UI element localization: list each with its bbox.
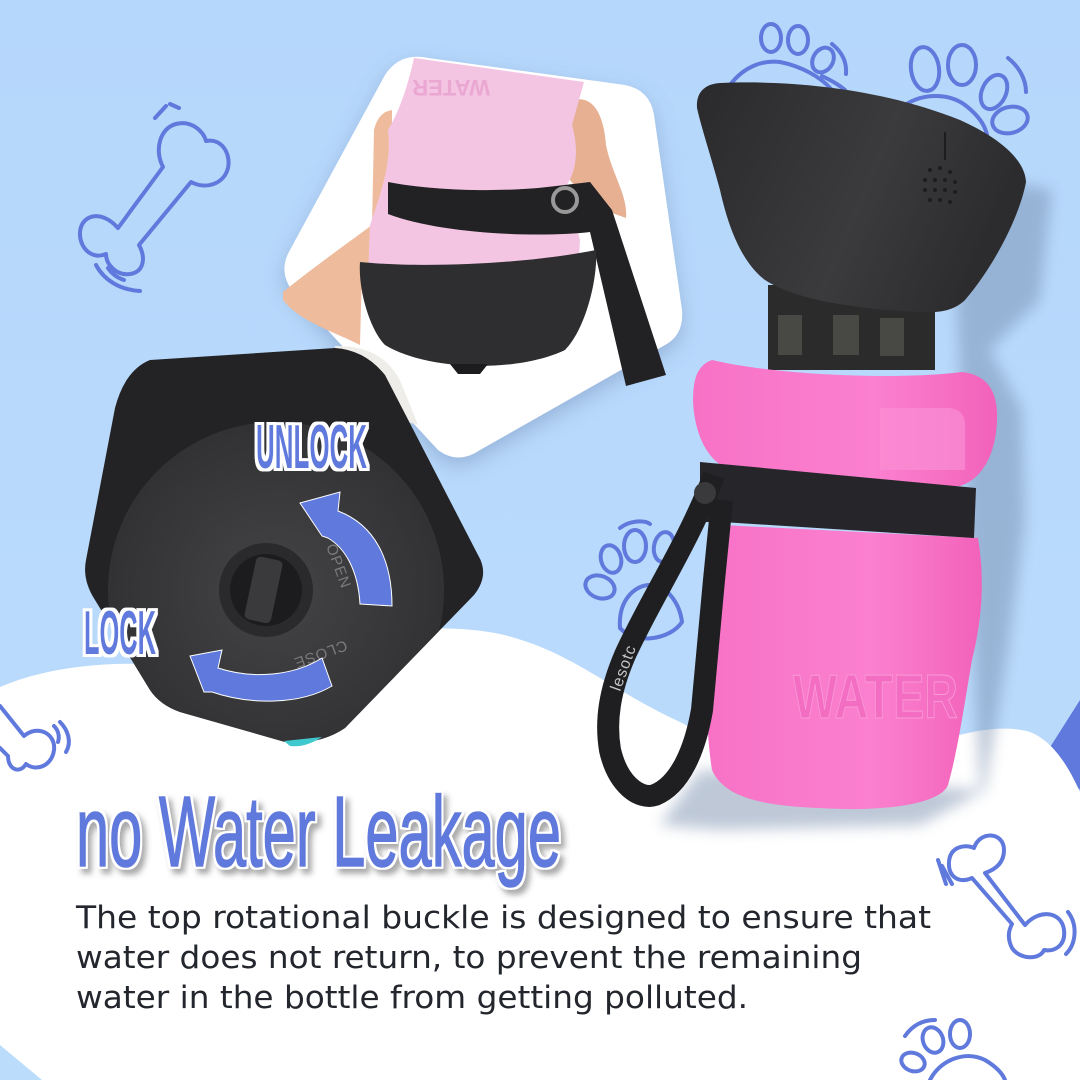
pink top section <box>693 360 997 488</box>
icon: paw top right <box>905 45 1031 137</box>
bowl dots <box>923 166 957 204</box>
bottle shadow <box>660 170 1052 830</box>
photo: right fingers <box>562 99 626 218</box>
knob <box>219 543 313 637</box>
bottle neck <box>768 285 935 370</box>
panel: hand holding bottle photo <box>283 57 682 458</box>
photo: bottle lettering: WATER <box>412 75 490 100</box>
arrow: lock <box>190 650 332 701</box>
strap rivet <box>694 482 716 504</box>
title: no Water Leakage <box>76 776 561 888</box>
cyan tip <box>284 737 322 746</box>
icon: bone right <box>938 835 1075 957</box>
strap loop <box>608 475 722 796</box>
white cloud <box>0 628 1080 1080</box>
lid engraved open: OPEN <box>322 542 354 591</box>
main bottle <box>608 82 1052 830</box>
icon: paw bottom right <box>899 1020 1005 1080</box>
arrow: unlock <box>300 492 392 606</box>
photo: black bowl <box>360 250 596 366</box>
panel: lid top view photo <box>85 346 484 746</box>
body text: water in the bottle from getting polluted. <box>76 980 748 1016</box>
pink window <box>880 408 965 470</box>
lid engraved close: CLOSE <box>291 636 349 671</box>
icon: paw middle <box>582 521 682 638</box>
body text: water does not return, to prevent the remaining <box>76 940 862 976</box>
body text: The top rotational buckle is designed to ensure that <box>75 900 931 936</box>
water text: WATER <box>793 663 958 732</box>
strap brand: lesotc <box>608 643 640 693</box>
photo: pink bottle <box>368 58 584 275</box>
lid body <box>85 348 484 742</box>
pink bottom section <box>706 525 982 809</box>
photo: strap ring <box>553 188 577 212</box>
text: UNLOCK <box>256 413 367 482</box>
white back corner <box>330 346 418 425</box>
band <box>700 462 976 538</box>
icon: bone left edge <box>0 706 69 770</box>
photo: left hand <box>283 110 392 345</box>
corner accent right <box>1047 700 1080 790</box>
bowl <box>697 82 1026 312</box>
bowl mark <box>944 132 946 160</box>
text: LOCK <box>84 599 156 668</box>
photo: bowl foot <box>450 364 488 374</box>
icon: paw top centre <box>730 24 846 90</box>
icon: bone top left <box>80 104 229 291</box>
photo: strap <box>388 182 666 386</box>
